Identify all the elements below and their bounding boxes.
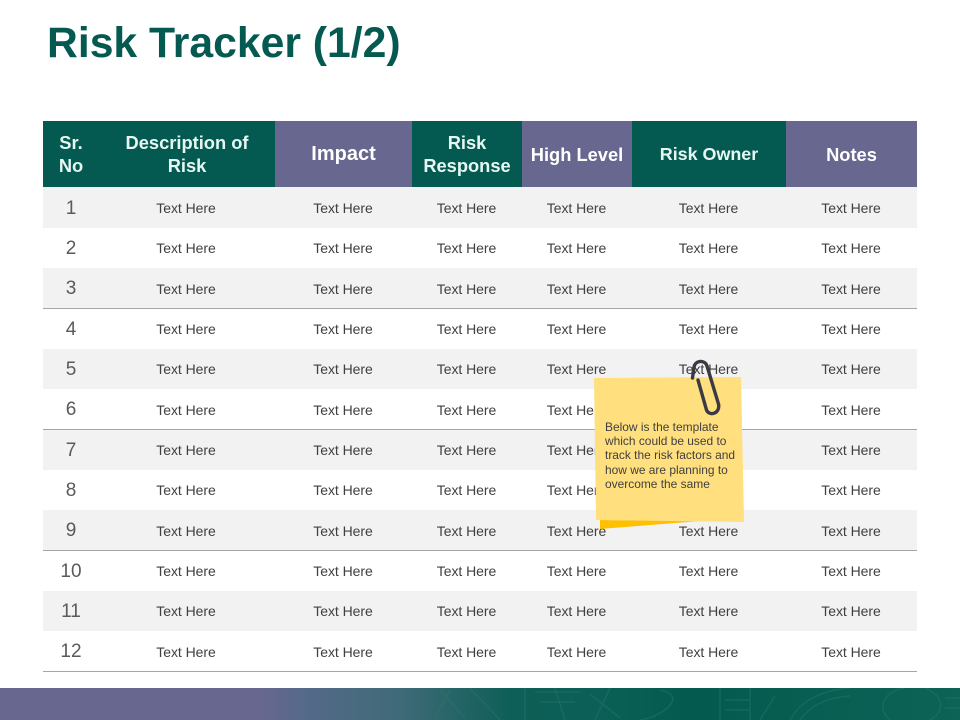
row 10 <box>60 561 881 582</box>
icon: paper clip <box>692 361 719 414</box>
row 10: Text Here <box>821 563 881 579</box>
header: Sr. No <box>43 121 99 187</box>
row 7 <box>43 430 917 470</box>
row 2: Text Here <box>313 240 373 256</box>
row 9: Text Here <box>547 523 606 539</box>
row 4 <box>66 319 881 340</box>
row 4: Text Here <box>313 321 373 337</box>
row 12: 12 <box>60 641 82 662</box>
row 2: Text Here <box>679 240 738 256</box>
header: Risk Owner <box>632 121 786 187</box>
row 6: Text Here <box>547 402 606 418</box>
row 5: 5 <box>66 359 76 380</box>
header: Risk Owner: Risk Owner <box>660 144 758 164</box>
row 8: Text Here <box>679 482 738 498</box>
header: Risk Response: Risk <box>448 132 486 153</box>
row 4: Text Here <box>679 321 738 337</box>
row 9: Text Here <box>313 523 373 539</box>
row 4: Text Here <box>156 321 216 337</box>
row 12: Text Here <box>156 644 216 660</box>
row 3: Text Here <box>437 281 496 297</box>
row 1: Text Here <box>547 200 606 216</box>
row 7: Text Here <box>156 442 216 458</box>
row 3: Text Here <box>821 281 881 297</box>
note text: overcome the same <box>605 477 710 491</box>
row 12: Text Here <box>547 644 606 660</box>
row 12: Text Here <box>437 644 496 660</box>
row 11: Text Here <box>821 603 881 619</box>
row 12: Text Here <box>821 644 881 660</box>
header: Risk Response: Response <box>423 155 511 176</box>
row 3: Text Here <box>547 281 606 297</box>
row 1: Text Here <box>821 200 881 216</box>
row 2 <box>66 238 881 259</box>
row 5: Text Here <box>679 361 738 377</box>
row 5: Text Here <box>437 361 496 377</box>
row 3 <box>43 268 917 309</box>
row 3: Text Here <box>679 281 738 297</box>
row 5: Text Here <box>821 361 881 377</box>
row 10: Text Here <box>679 563 738 579</box>
row 5: Text Here <box>156 361 216 377</box>
row 9: Text Here <box>156 523 216 539</box>
row 4: Text Here <box>547 321 606 337</box>
row 6: Text Here <box>679 402 738 418</box>
row 4: Text Here <box>437 321 496 337</box>
row 10: Text Here <box>156 563 216 579</box>
row 6: Text Here <box>437 402 496 418</box>
row 10: Text Here <box>313 563 373 579</box>
header: High Level <box>522 121 632 187</box>
row 6: Text Here <box>313 402 373 418</box>
row 1: Text Here <box>156 200 216 216</box>
header: Description of Risk: Risk <box>168 155 206 176</box>
row 4: Text Here <box>821 321 881 337</box>
row 8: Text Here <box>156 482 216 498</box>
header: Impact: Impact <box>311 142 376 164</box>
row 2: 2 <box>66 238 76 259</box>
header: Impact <box>275 121 412 187</box>
row 7: Text Here <box>679 442 738 458</box>
row 11: Text Here <box>547 603 606 619</box>
row 7: Text Here <box>821 442 881 458</box>
header: Sr. No: Sr. <box>59 132 83 153</box>
row 1 <box>43 187 917 228</box>
title: Risk Tracker (1/2) <box>47 19 401 67</box>
note paper <box>594 377 744 522</box>
row 5: Text Here <box>547 361 606 377</box>
row 6: 6 <box>66 399 76 420</box>
note text: Below is the template <box>605 420 719 434</box>
row 12: Text Here <box>679 644 738 660</box>
row 11: 11 <box>61 601 81 622</box>
note fold shadow <box>600 520 700 529</box>
row 8: Text Here <box>437 482 496 498</box>
row 9: Text Here <box>821 523 881 539</box>
row 2: Text Here <box>156 240 216 256</box>
note text <box>604 420 735 491</box>
row 7: Text Here <box>547 442 606 458</box>
row 11 <box>43 591 917 631</box>
header: Risk Response <box>412 121 522 187</box>
row 8 <box>66 480 881 501</box>
row 3: Text Here <box>156 281 216 297</box>
row 8: 8 <box>66 480 76 501</box>
header: Description of Risk <box>99 121 275 187</box>
header: High Level: High Level <box>531 144 623 164</box>
note text: which could be used to <box>604 434 727 448</box>
row 3: Text Here <box>313 281 373 297</box>
row 6 <box>43 389 917 430</box>
row 1: Text Here <box>679 200 738 216</box>
row 5 <box>43 349 917 389</box>
row 9: Text Here <box>679 523 738 539</box>
note text: track the risk factors and <box>605 448 735 462</box>
row 11: Text Here <box>437 603 496 619</box>
row 7: Text Here <box>437 442 496 458</box>
row 5: Text Here <box>313 361 373 377</box>
row 9: Text Here <box>437 523 496 539</box>
row 11: Text Here <box>156 603 216 619</box>
row 8: Text Here <box>547 482 606 498</box>
row 8: Text Here <box>313 482 373 498</box>
row 9 <box>43 510 917 551</box>
row 2: Text Here <box>437 240 496 256</box>
row 8: Text Here <box>821 482 881 498</box>
row 12 <box>43 631 917 672</box>
row 2: Text Here <box>821 240 881 256</box>
row 10: Text Here <box>547 563 606 579</box>
header: Sr. No: No <box>59 155 83 176</box>
header: Notes <box>786 121 917 187</box>
footer band <box>0 688 960 720</box>
row 6: Text Here <box>821 402 881 418</box>
row 2: Text Here <box>547 240 606 256</box>
row 6: Text Here <box>156 402 216 418</box>
row 12: Text Here <box>313 644 373 660</box>
row 9: 9 <box>66 520 76 541</box>
row 11: Text Here <box>679 603 738 619</box>
row 11: Text Here <box>313 603 373 619</box>
note text: how we are planning to <box>605 463 728 477</box>
row 1: 1 <box>66 198 76 218</box>
row 7: 7 <box>66 440 76 461</box>
row 4: 4 <box>66 319 76 340</box>
row 1: Text Here <box>313 200 373 216</box>
header: Notes: Notes <box>826 144 877 164</box>
row 10: Text Here <box>437 563 496 579</box>
row 7: Text Here <box>313 442 373 458</box>
header: Description of Risk: Description of <box>126 132 248 153</box>
row 10: 10 <box>60 561 82 582</box>
row 1: Text Here <box>437 200 496 216</box>
row 3: 3 <box>66 278 76 299</box>
